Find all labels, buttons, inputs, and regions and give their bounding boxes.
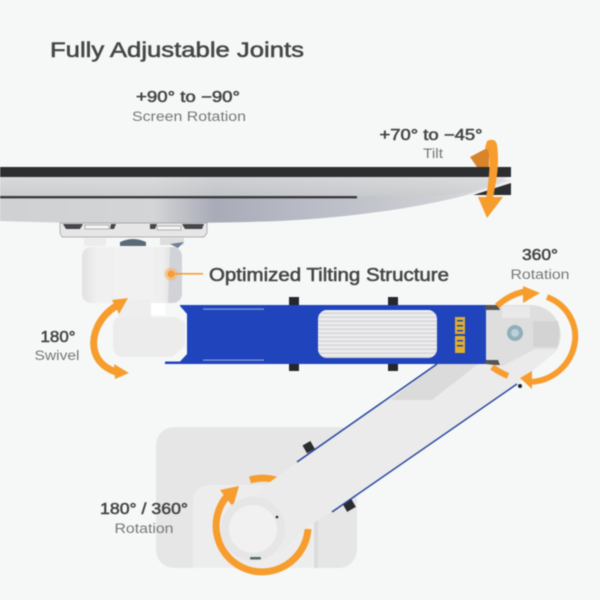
label: elbow rotation <box>510 247 570 282</box>
label: screen rotation: Screen Rotation <box>132 109 246 124</box>
arrow: swivel <box>94 298 129 379</box>
label: elbow rotation: Rotation <box>510 267 570 282</box>
arm highlights <box>203 308 264 361</box>
label: tilt: +70° to −45° <box>380 127 482 144</box>
label: tilt <box>380 127 482 161</box>
label: tilt: Tilt <box>423 146 443 161</box>
label: base rotation <box>100 501 188 536</box>
label: screen rotation: +90° to −90° <box>136 89 240 106</box>
blue arm body <box>165 305 486 364</box>
title: Fully Adjustable Joints <box>50 39 304 62</box>
base plate <box>156 427 357 568</box>
label: screen rotation <box>132 89 246 124</box>
callout: tilting structure: Optimized Tilting Structure <box>209 265 449 285</box>
swivel knuckle <box>113 317 185 357</box>
label: elbow rotation: 360° <box>522 247 558 264</box>
VESA bracket <box>60 223 207 248</box>
label: swivel: Swivel <box>34 348 80 363</box>
black tabs <box>289 297 398 371</box>
elbow joint <box>484 305 561 388</box>
label: swivel: 180° <box>40 329 76 346</box>
label: swivel <box>34 329 80 363</box>
arrow: elbow rotation <box>492 286 575 389</box>
upper arm <box>113 297 486 371</box>
base rotation arrowhead <box>220 486 239 507</box>
base knob <box>221 497 285 561</box>
ribbed cover <box>318 310 437 358</box>
icon: hinge callout marker <box>164 268 203 280</box>
base rotation ring <box>216 478 308 572</box>
monitor side view <box>0 167 511 223</box>
label: base rotation: 180° / 360° <box>100 501 188 518</box>
rear clamps <box>303 441 356 512</box>
label: base rotation: Rotation <box>114 521 174 536</box>
lower arm <box>250 349 557 555</box>
yellow logo <box>455 317 465 353</box>
arrow: tilt <box>470 140 503 218</box>
tilting hinge <box>82 247 182 322</box>
